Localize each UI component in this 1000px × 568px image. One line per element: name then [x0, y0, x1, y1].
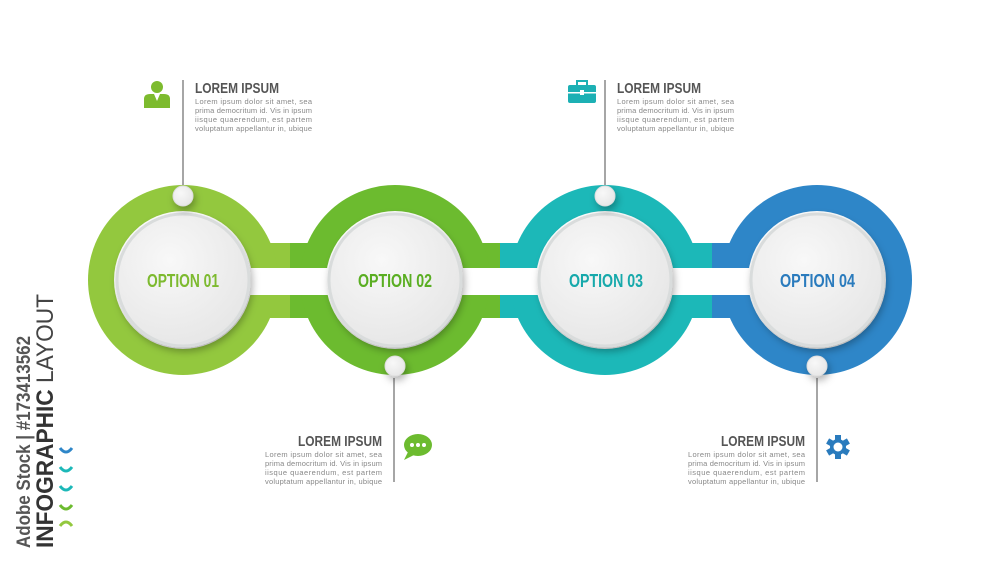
text block 4: prima democritum id. Vis in ipsum: [688, 459, 805, 468]
icon: briefcase: [568, 81, 596, 103]
text block 3: LOREM IPSUM: [617, 80, 701, 97]
side title: INFOGRAPHIC LAYOUT: [32, 294, 59, 548]
text block 4: LOREM IPSUM: [721, 433, 805, 450]
text block 2: voluptatum appellantur in, ubique: [265, 477, 382, 486]
text block 1: [195, 80, 313, 133]
option 01 circle: [114, 211, 252, 349]
text block 1: LOREM IPSUM: [195, 80, 279, 97]
text block 4: [688, 433, 806, 486]
side title: Adobe Stock | #173413562: [14, 336, 35, 548]
icon: gear: [826, 435, 850, 459]
option 04 circle: OPTION 04: [780, 271, 855, 291]
option 03 circle: OPTION 03: [569, 271, 643, 291]
option 01 circle: OPTION 01: [147, 271, 219, 291]
text block 2: iisque quaerendum, est partem: [265, 468, 382, 477]
icon: person: [144, 81, 170, 108]
text block 1: prima democritum id. Vis in ipsum: [195, 106, 312, 115]
option 03 circle: [536, 211, 674, 349]
option 04 circle: [748, 211, 886, 349]
option 02 circle: [326, 211, 464, 349]
side waves logo: [60, 448, 72, 526]
text block 2: LOREM IPSUM: [298, 433, 382, 450]
side title: [14, 294, 59, 548]
text block 3: Lorem ipsum dolor sit amet, sea: [617, 97, 735, 106]
icon: chat bubble: [404, 434, 432, 460]
text block 4: iisque quaerendum, est partem: [688, 468, 805, 477]
leader lines: [183, 80, 817, 482]
text block 2: [265, 433, 383, 486]
rings: [88, 185, 912, 375]
text block 1: Lorem ipsum dolor sit amet, sea: [195, 97, 313, 106]
text block 2: prima democritum id. Vis in ipsum: [265, 459, 382, 468]
text block 3: voluptatum appellantur in, ubique: [617, 124, 734, 133]
connectors: [250, 243, 752, 318]
text block 1: iisque quaerendum, est partem: [195, 115, 312, 124]
knobs: [173, 186, 827, 376]
text block 4: Lorem ipsum dolor sit amet, sea: [688, 450, 806, 459]
text block 3: [617, 80, 735, 133]
text block 1: voluptatum appellantur in, ubique: [195, 124, 312, 133]
text block 2: Lorem ipsum dolor sit amet, sea: [265, 450, 383, 459]
option 02 circle: OPTION 02: [358, 271, 432, 291]
text block 4: voluptatum appellantur in, ubique: [688, 477, 805, 486]
text block 3: prima democritum id. Vis in ipsum: [617, 106, 734, 115]
text block 3: iisque quaerendum, est partem: [617, 115, 734, 124]
